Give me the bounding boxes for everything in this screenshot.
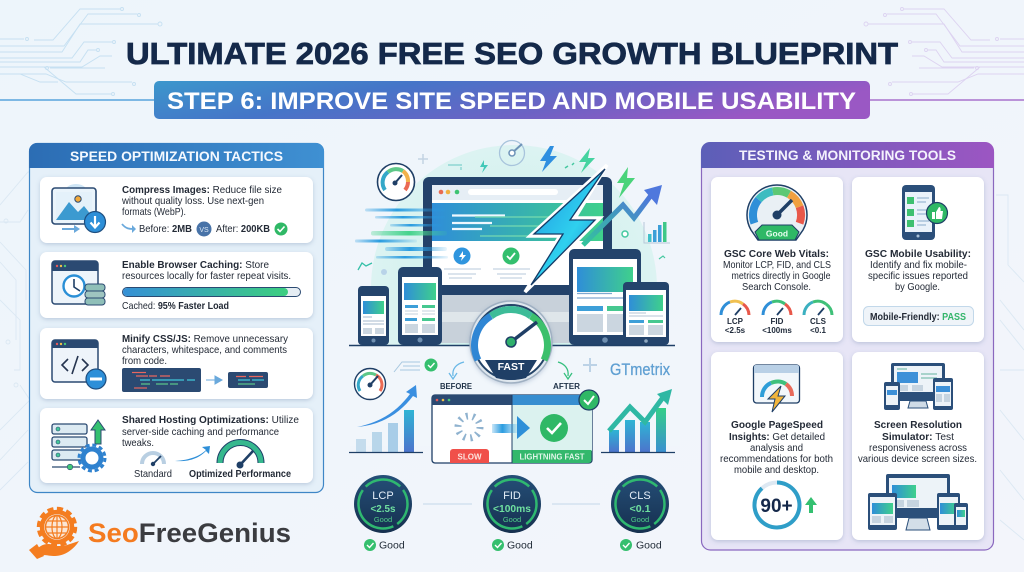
icon: responsive devices bottom xyxy=(868,474,968,530)
icon: large check xyxy=(540,414,568,442)
description: Search Console. xyxy=(742,282,811,293)
description xyxy=(122,415,299,449)
card: GSC mobile usability xyxy=(852,177,984,342)
description: formats (WebP). xyxy=(122,207,186,218)
icon: check with lines xyxy=(394,358,438,372)
description: specific issues reported xyxy=(868,271,968,282)
description: mobile and desktop. xyxy=(734,465,819,476)
description: Minify CSS/JS: Remove unnecessary xyxy=(122,334,289,345)
metric: LCP: <2.5s xyxy=(370,503,396,515)
metric: LCP xyxy=(349,470,417,538)
gauge: optimized performance: Optimized Performance xyxy=(189,469,291,480)
mini gauge: CLS: <0.1 xyxy=(810,326,826,335)
icon: badge check xyxy=(579,390,599,410)
mini gauge: FID: FID xyxy=(771,317,784,326)
metric: FID: <100ms xyxy=(493,503,531,515)
score ring: 90+ xyxy=(754,482,817,528)
icon: pagespeed window xyxy=(754,365,800,412)
description: from code. xyxy=(122,356,167,367)
description: Simulator: Test xyxy=(882,432,954,443)
description: server-side caching and performance xyxy=(122,427,279,438)
device: tablet small xyxy=(623,282,669,345)
gauge: good: Good xyxy=(766,228,788,238)
status: FID good: Good xyxy=(507,540,533,552)
description: GSC Core Web Vitals: xyxy=(724,249,829,260)
description: characters, whitespace, and comments xyxy=(122,345,287,356)
mini gauge: LCP: <2.5s xyxy=(725,326,746,335)
mini gauge: CLS xyxy=(804,301,832,335)
progress bar: 95 percent xyxy=(122,288,300,296)
before and after comparison: Before: 2MB xyxy=(139,224,192,235)
description: recommendations for both xyxy=(720,454,833,465)
panel heading xyxy=(701,142,994,168)
metric: FID: FID xyxy=(503,490,521,502)
gauge: fast xyxy=(470,301,552,383)
mobile-friendly pass badge: Mobile-Friendly: PASS xyxy=(870,312,966,323)
mini gauge: CLS: CLS xyxy=(810,317,827,326)
background glow xyxy=(371,145,657,431)
description: Compress Images: Reduce file size xyxy=(122,185,282,196)
floating icons xyxy=(358,140,665,275)
device: tablet large xyxy=(569,249,641,345)
subtitle band xyxy=(0,81,1024,119)
description xyxy=(122,260,291,282)
gauge: optimized performance xyxy=(189,442,291,480)
chart: before growth bars xyxy=(349,385,423,452)
before label xyxy=(440,362,473,391)
description: various device screen sizes. xyxy=(858,454,977,465)
transition arrow xyxy=(492,416,530,439)
gauge: standard: Standard xyxy=(134,469,172,480)
description: Shared Hosting Optimizations: Utilize xyxy=(122,415,299,426)
description xyxy=(858,420,977,465)
description: Google PageSpeed xyxy=(731,420,823,431)
arrow: growth line xyxy=(583,185,662,245)
before and after comparison xyxy=(122,222,288,236)
icon: gear globe and hand xyxy=(29,509,79,559)
description: Enable Browser Caching: Store xyxy=(122,260,269,271)
card: GSC core web vitals xyxy=(711,177,843,342)
arrow xyxy=(175,446,210,461)
logo: SeoFreeGenius xyxy=(29,509,291,559)
mini gauge: LCP: LCP xyxy=(727,317,744,326)
browser window: before and after xyxy=(432,390,599,463)
after label: AFTER xyxy=(553,382,580,391)
panel: testing and monitoring tools xyxy=(701,142,994,550)
wordmark: SeoFreeGenius xyxy=(88,518,291,548)
panel heading xyxy=(29,143,324,168)
description: resources locally for faster repeat visits. xyxy=(122,271,291,282)
lightning fast label xyxy=(512,450,592,463)
card: screen resolution simulator xyxy=(852,352,984,540)
mobile-friendly pass badge xyxy=(864,306,974,326)
mini gauge: FID xyxy=(762,301,792,335)
slow label: SLOW xyxy=(458,452,482,462)
metric: CLS: Good xyxy=(631,515,649,524)
metric: CLS: <0.1 xyxy=(630,503,651,515)
gauge: fast: FAST xyxy=(498,361,525,373)
mini gauge: FID: <100ms xyxy=(762,326,792,335)
metric: FID: Good xyxy=(503,515,521,524)
speed lines xyxy=(355,208,575,258)
device: phone small xyxy=(358,286,389,345)
subtitle band: STEP 6: IMPROVE SITE SPEED AND MOBILE USABILITY xyxy=(167,88,856,115)
card: browser caching xyxy=(40,252,313,318)
description xyxy=(121,185,282,218)
status: LCP good: Good xyxy=(379,540,405,552)
card: minify css js xyxy=(40,328,313,399)
gauge: top left xyxy=(378,164,414,200)
metric: CLS xyxy=(606,470,674,538)
code after xyxy=(228,372,268,388)
panel heading: SPEED OPTIMIZATION TACTICS xyxy=(70,149,283,164)
description: Insights: Get detailed xyxy=(729,432,825,443)
plus xyxy=(583,358,597,372)
gauge: good xyxy=(747,185,807,240)
device: phone large xyxy=(398,267,442,345)
before and after comparison: VS xyxy=(199,227,209,234)
score ring: 90+: 90+ xyxy=(760,496,793,517)
description: responsiveness across xyxy=(869,443,967,454)
icon: server and gear xyxy=(52,420,105,471)
title: ULTIMATE 2026 FREE SEO GROWTH BLUEPRINT xyxy=(126,36,898,71)
description: by Google. xyxy=(895,282,940,293)
metric: LCP: LCP xyxy=(372,490,394,502)
device: desktop monitor xyxy=(423,177,612,343)
icon: image download xyxy=(52,184,106,233)
description: Screen Resolution xyxy=(874,420,962,431)
chart: after growth bars xyxy=(601,389,675,452)
card: shared hosting xyxy=(40,408,313,483)
logo: GTmetrix: GTmetrix xyxy=(610,360,670,379)
description: Monitor LCP, FID, and CLS xyxy=(723,260,831,271)
description xyxy=(865,249,971,293)
description xyxy=(720,420,833,476)
description: Identify and fix mobile- xyxy=(870,260,967,271)
chart: small bars xyxy=(644,222,670,243)
status: CLS good xyxy=(620,539,662,552)
description xyxy=(122,334,289,367)
before and after comparison: After: 200KB xyxy=(216,224,270,235)
arrow xyxy=(206,376,222,384)
icon: clock and database xyxy=(52,261,105,305)
metric: CLS: CLS xyxy=(629,490,651,502)
status: LCP good xyxy=(364,539,405,552)
gauge: small lower left xyxy=(354,368,386,400)
loading spinner xyxy=(458,416,480,438)
panel: speed optimization tactics xyxy=(29,143,324,492)
icon: responsive devices top xyxy=(884,363,953,410)
slow label xyxy=(450,449,489,463)
description: tweaks. xyxy=(122,438,154,449)
card: Google PageSpeed Insights xyxy=(711,352,843,540)
description: GSC Mobile Usability: xyxy=(865,249,971,260)
circuit decoration left xyxy=(0,8,162,490)
code before xyxy=(122,368,201,392)
description: without quality loss. Use next-gen xyxy=(121,196,264,207)
after label xyxy=(553,362,580,391)
progress label: Cached: 95% Faster Load xyxy=(122,301,229,312)
icon: code window xyxy=(52,340,106,389)
circuit decoration right xyxy=(864,8,1024,540)
description: analysis and xyxy=(750,443,803,454)
description: metrics directly in Google xyxy=(732,271,831,282)
panel heading: TESTING & MONITORING TOOLS xyxy=(739,148,956,163)
status: CLS good: Good xyxy=(636,540,662,552)
gauge: standard xyxy=(134,453,172,480)
before label: BEFORE xyxy=(440,382,473,391)
mini gauge: LCP xyxy=(721,301,749,335)
status: FID good xyxy=(492,539,533,552)
icon: phone checklist with thumbs up xyxy=(902,185,948,240)
metric: LCP: Good xyxy=(374,515,392,524)
central illustration xyxy=(349,140,680,552)
description xyxy=(723,249,831,293)
icon: lightning bolt xyxy=(525,165,607,292)
metric: FID xyxy=(478,470,546,538)
lightning fast label: LIGHTNING FAST xyxy=(520,452,585,462)
card: compress images xyxy=(40,177,313,243)
